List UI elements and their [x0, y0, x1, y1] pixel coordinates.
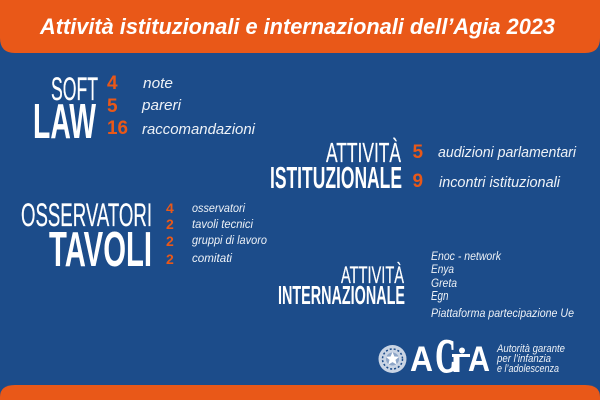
wordmark: A	[410, 340, 433, 379]
title: Attività istituzionali e internazionali dell’Agia 2023	[39, 14, 555, 39]
stat: 4 note: note	[143, 76, 173, 92]
heading: attività istituzionale: ISTITUZIONALE	[270, 161, 402, 195]
agency name: e l’adolescenza	[497, 363, 559, 375]
header banner	[0, 0, 600, 53]
stat: 2 comitati: comitati	[192, 253, 232, 265]
stat: 16 raccomandazioni	[107, 118, 256, 139]
stat: 2 gruppi di lavoro: gruppi di lavoro	[192, 235, 268, 247]
stat: 4 note: 4	[107, 73, 118, 94]
heading: osservatori tavoli	[21, 197, 152, 277]
stat: 4 note	[107, 73, 173, 94]
heading: attività internazionale	[278, 262, 405, 310]
heading: attività istituzionale: ATTIVITÀ	[326, 137, 401, 168]
heading: osservatori tavoli: TAVOLI	[49, 222, 152, 277]
stat: 2 comitati: 2	[166, 251, 174, 267]
agency name: Autorità garante	[496, 343, 565, 355]
stat: 2 tavoli tecnici: 2	[166, 216, 174, 232]
stat: 2 comitati	[166, 251, 232, 267]
stat: 5 audizioni parlamentari: audizioni parlamentari	[438, 145, 577, 161]
agency name: per l’infanzia	[496, 353, 551, 365]
heading: soft law: SOFT	[51, 71, 98, 107]
footer bar	[0, 385, 600, 400]
wordmark: A	[468, 340, 490, 379]
heading: soft law: LAW	[33, 94, 96, 149]
list: international networks	[431, 251, 574, 320]
stat: 4 osservatori: 4	[166, 200, 174, 216]
stat: 5 pareri	[107, 96, 182, 117]
list: international networks: Greta	[431, 278, 457, 290]
heading: attività internazionale: ATTIVITÀ	[341, 262, 404, 289]
stat: 4 osservatori	[166, 200, 245, 216]
icon: Italian emblem	[378, 345, 406, 373]
stat: 2 gruppi di lavoro	[166, 233, 268, 249]
panel: osservatori e tavoli	[21, 197, 268, 277]
heading: osservatori tavoli: OSSERVATORI	[21, 197, 152, 233]
panel: attività istituzionale	[270, 137, 577, 195]
list: international networks: Egn	[431, 289, 449, 303]
stat: 5 audizioni parlamentari: 5	[412, 142, 424, 163]
stat: 16 raccomandazioni: raccomandazioni	[142, 122, 256, 138]
heading: attività istituzionale	[270, 137, 402, 195]
stat: 4 osservatori: osservatori	[192, 203, 245, 215]
stat: 5 audizioni parlamentari	[412, 142, 577, 163]
stat: 2 tavoli tecnici: tavoli tecnici	[192, 219, 253, 231]
heading: soft law	[33, 71, 98, 149]
agency name	[496, 343, 565, 375]
list: international networks: Piattaforma partecipazione Ue	[431, 308, 574, 320]
panel: soft law	[33, 71, 256, 149]
logo: AGIA	[378, 330, 565, 383]
wordmark: C	[436, 330, 456, 383]
stat: 2 gruppi di lavoro: 2	[166, 233, 174, 249]
list: international networks: Enya	[431, 264, 454, 276]
stat: 9 incontri istituzionali: 9	[412, 171, 423, 192]
stat: 16 raccomandazioni: 16	[107, 118, 128, 139]
list: international networks: Enoc - network	[431, 251, 502, 263]
panel: attività internazionale	[278, 251, 574, 320]
stat: 9 incontri istituzionali	[412, 171, 561, 192]
heading: attività internazionale: INTERNAZIONALE	[278, 280, 405, 310]
wordmark	[410, 330, 490, 383]
stat: 9 incontri istituzionali: incontri istituzionali	[439, 175, 561, 191]
stat: 2 tavoli tecnici	[166, 216, 253, 232]
stat: 5 pareri: 5	[107, 96, 118, 117]
stat: 5 pareri: pareri	[141, 98, 182, 114]
